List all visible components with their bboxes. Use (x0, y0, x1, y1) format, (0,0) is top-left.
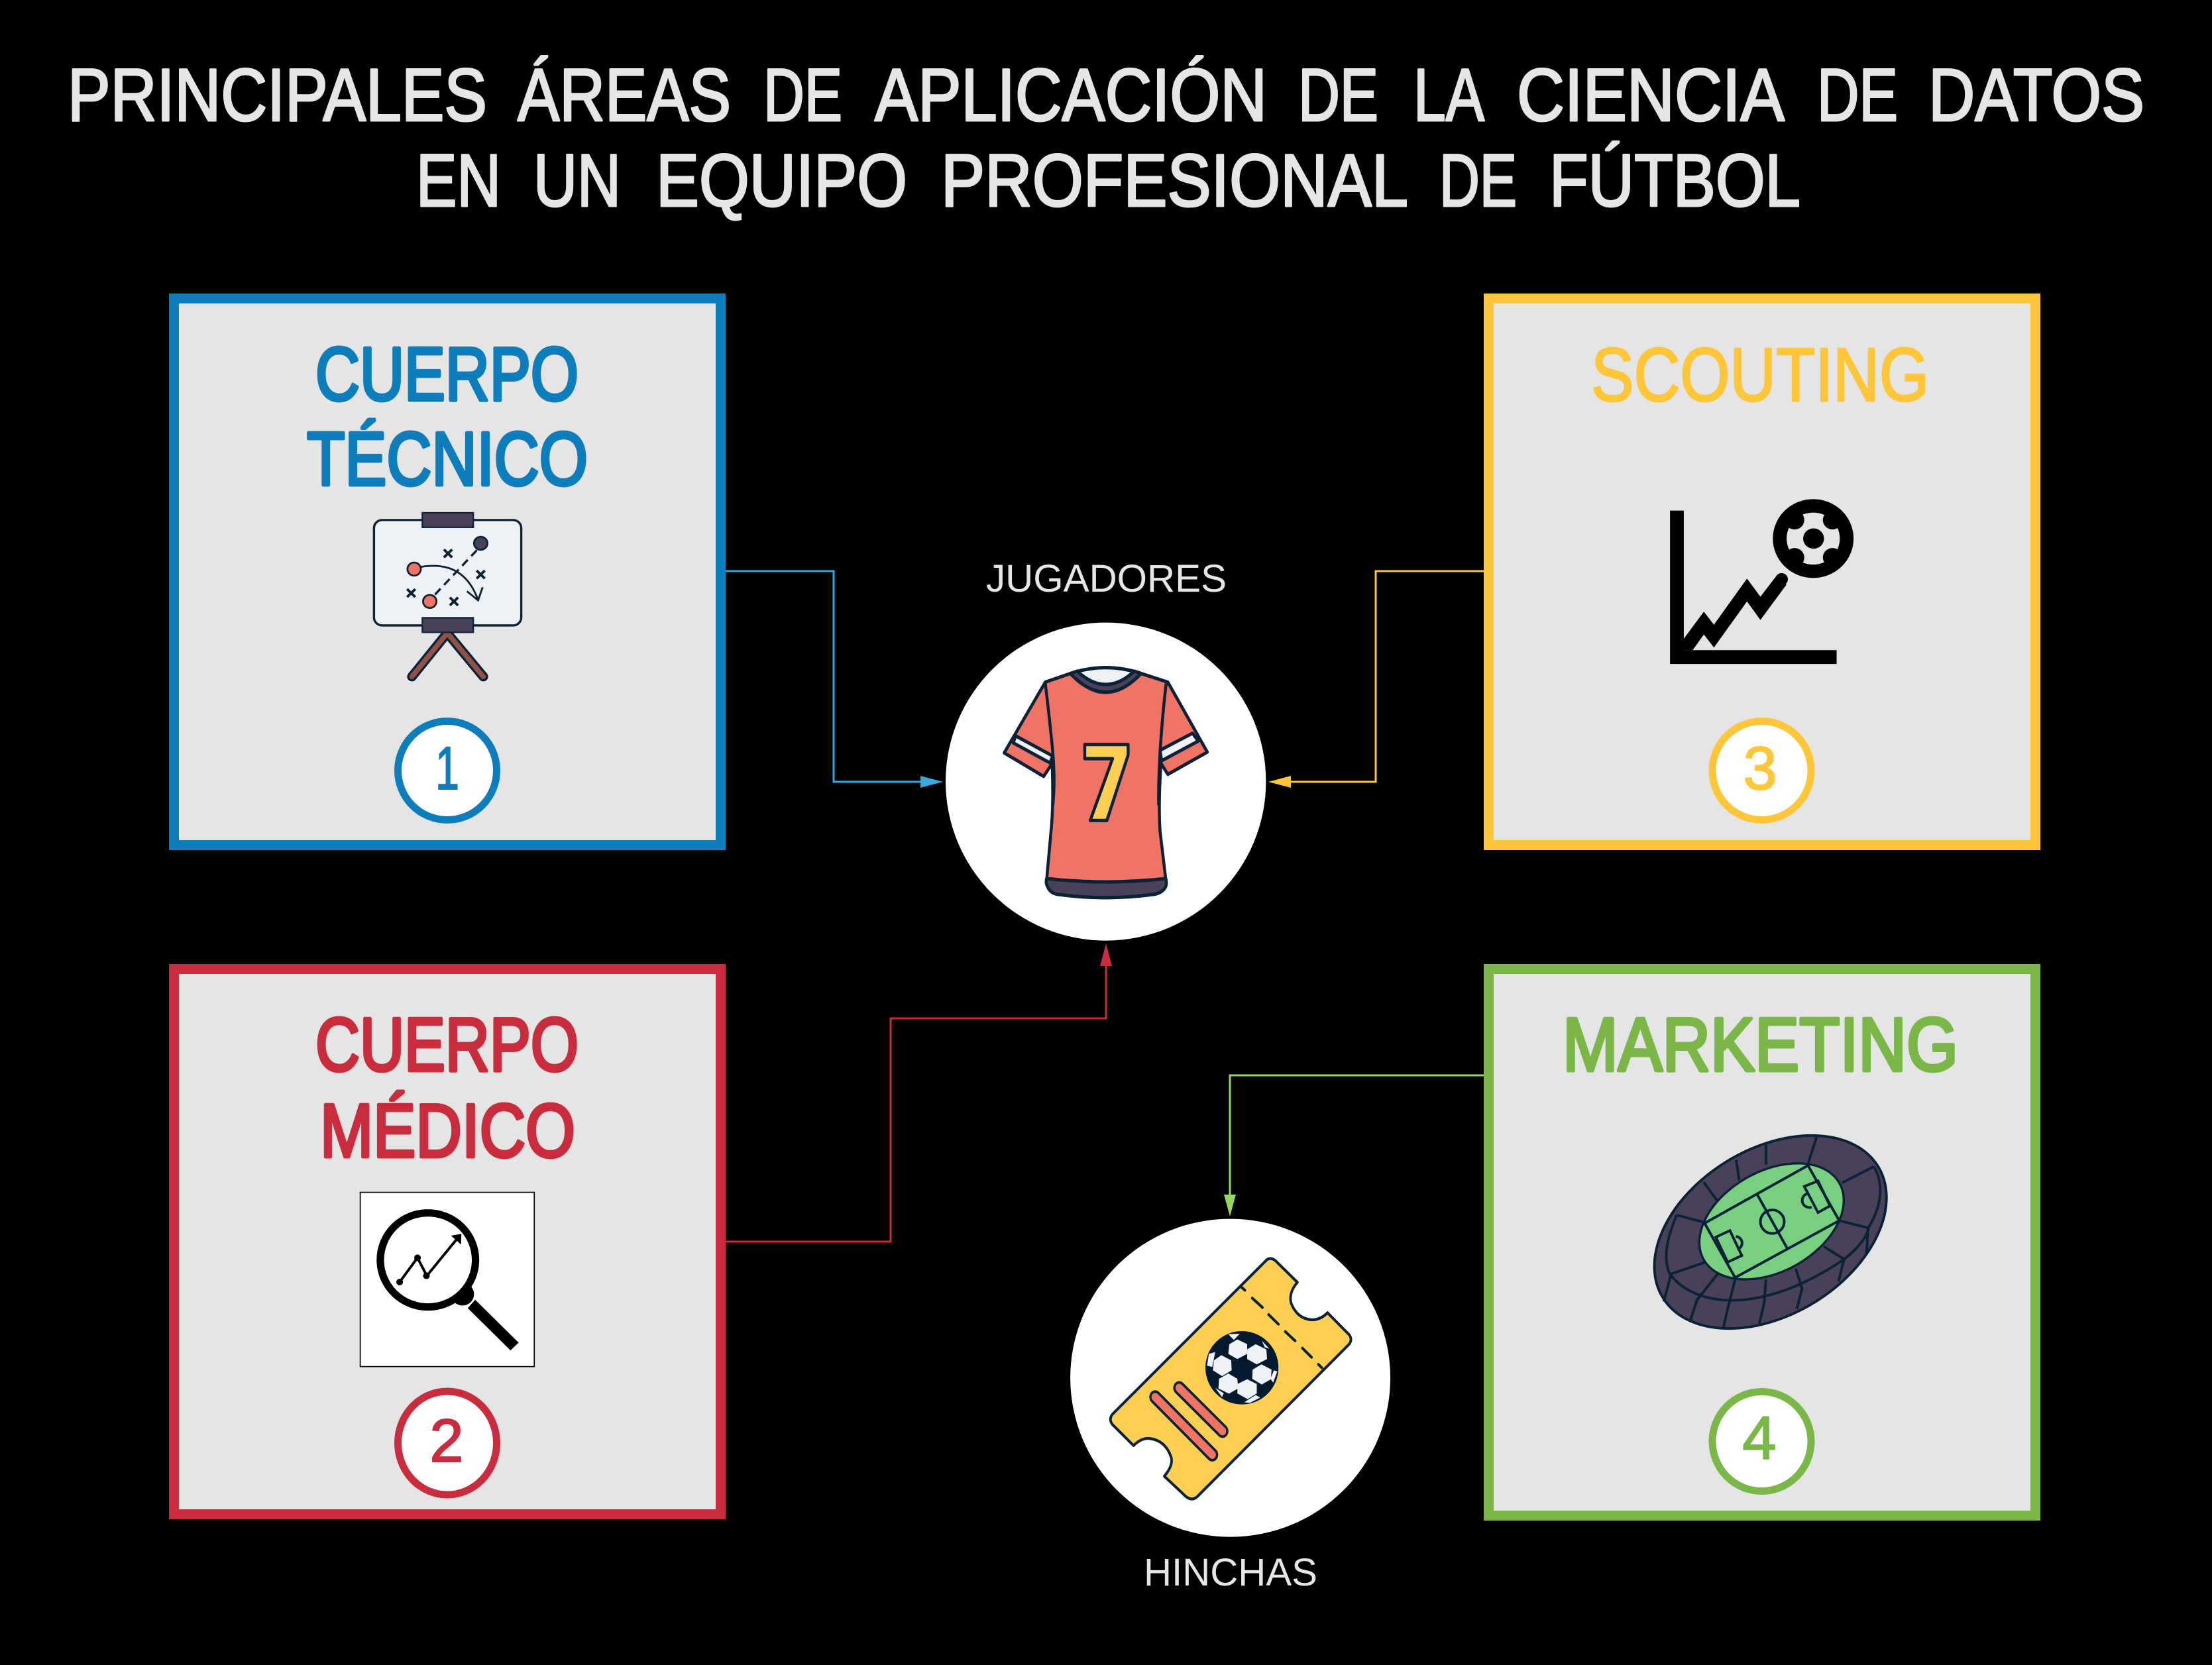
white circle (1070, 1219, 1390, 1537)
node: jugadores (946, 557, 1266, 941)
arrow: marketing to hinchas (1224, 1075, 1484, 1216)
arrow: cuerpo técnico to jugadores (726, 571, 943, 788)
panel: scouting (1488, 298, 2036, 845)
heading: cuerpo técnico: CUERPO (315, 333, 579, 417)
title: LA (1413, 54, 1484, 136)
label: hinchas: HINCHAS (1144, 1551, 1317, 1594)
title: APLICACIÓN (875, 54, 1267, 136)
icon: football ticket (1111, 1259, 1351, 1499)
icon: chart with football (1670, 506, 1847, 664)
title: PROFESIONAL (941, 139, 1408, 222)
number badge 4 (1712, 1391, 1811, 1491)
node: hinchas (1070, 1219, 1390, 1594)
title: FÚTBOL (1549, 139, 1800, 222)
title: DE (1298, 54, 1378, 136)
icon: stadium (1619, 1096, 1922, 1368)
heading: cuerpo médico (315, 1003, 579, 1173)
heading: marketing: MARKETING (1563, 1003, 1958, 1087)
label: jugadores: JUGADORES (986, 557, 1227, 600)
number badge 4: 4 (1742, 1405, 1777, 1472)
football (1205, 1331, 1278, 1405)
title: EQUIPO (656, 139, 907, 222)
title: EN (416, 139, 501, 222)
title: UN (533, 139, 621, 222)
heading: cuerpo médico: MÉDICO (320, 1089, 575, 1173)
number badge 1: 1 (435, 735, 459, 802)
title: DATOS (1928, 54, 2144, 136)
icon: red jersey number 7 (1004, 668, 1207, 898)
number badge 3 (1712, 721, 1811, 820)
title: DE (1817, 54, 1898, 136)
white circle (946, 623, 1266, 941)
title: CIENCIA (1517, 54, 1785, 136)
title: PRINCIPALES (68, 54, 487, 136)
number badge 2: 2 (429, 1407, 464, 1475)
heading: cuerpo técnico (307, 333, 588, 502)
title: DE (763, 54, 842, 136)
heading: cuerpo médico: CUERPO (315, 1003, 579, 1087)
panel: cuerpo técnico (174, 298, 721, 845)
arrow: cuerpo médico to jugadores (726, 943, 1112, 1242)
title (68, 54, 2144, 222)
heading: scouting: SCOUTING (1591, 333, 1929, 417)
icon: tactics board (374, 513, 522, 676)
number badge 1 (398, 721, 497, 820)
number badge 2 (398, 1391, 497, 1495)
panel: marketing (1488, 969, 2036, 1516)
arrow: scouting to jugadores (1268, 571, 1484, 788)
icon: magnifier with chart (360, 1193, 534, 1367)
panel: cuerpo médico (174, 969, 721, 1515)
number badge 3: 3 (1743, 735, 1777, 802)
title: ÁREAS (518, 54, 731, 136)
heading: cuerpo técnico: TÉCNICO (307, 417, 588, 502)
title: DE (1439, 139, 1517, 222)
